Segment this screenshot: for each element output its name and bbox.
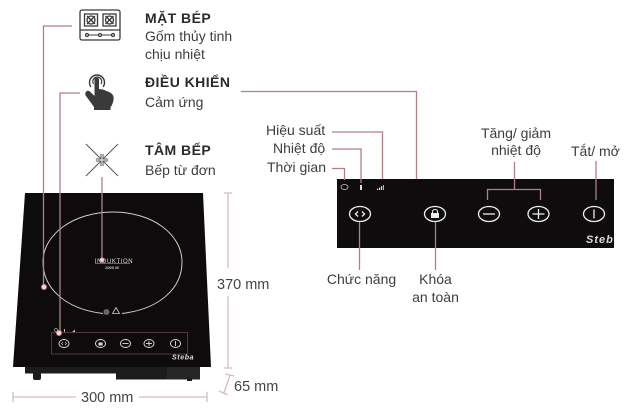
- leader line: zoomed panel: [241, 92, 416, 179]
- icon: single burner: [86, 144, 118, 176]
- button: safety lock: [424, 206, 446, 222]
- dimension: width: [13, 390, 207, 406]
- ring symbols: [104, 308, 120, 315]
- label: safety lock: Khóa: [419, 271, 452, 287]
- icon: touch hand: [85, 75, 114, 110]
- control area outline: [52, 332, 188, 354]
- leader line: controls: [56, 93, 80, 336]
- text: touch controls: Cảm ứng: [145, 94, 203, 110]
- label: increase / decrease temperature: nhiệt độ: [491, 142, 541, 158]
- panel: control panel close-up: [337, 179, 621, 248]
- burner ring: [43, 212, 182, 314]
- heading: burner: TÂM BẾP: [145, 141, 211, 158]
- text: cooktop surface material: chịu nhiệt: [145, 46, 205, 62]
- dimension: depth: 65 mm: [234, 379, 278, 395]
- burner label: INDUKTION: [95, 259, 133, 265]
- label: function: Chức năng: [327, 271, 396, 287]
- text: cooktop surface material: Gốm thủy tinh: [145, 28, 232, 44]
- cooktop base: [25, 366, 200, 381]
- label: safety lock: an toàn: [412, 289, 459, 305]
- label: increase / decrease temperature: [481, 125, 551, 200]
- leader line: burner: [100, 177, 104, 262]
- dimension: height: 370 mm: [217, 277, 269, 293]
- label: on / off: Tắt/ mở: [571, 143, 620, 159]
- label: performance: [266, 122, 382, 179]
- brand logo cropped: Steba: [586, 234, 621, 246]
- label: on / off: [571, 143, 620, 200]
- label: function: [327, 222, 396, 287]
- button: function: [350, 206, 370, 222]
- mini control buttons: [59, 340, 180, 348]
- button: increase: [528, 206, 549, 222]
- dimension: width: 300 mm: [81, 390, 133, 406]
- heading: cooktop surface: MẶT BÉP: [145, 10, 211, 26]
- label: increase / decrease temperature: Tăng/ giảm: [481, 125, 551, 141]
- brand logo: Steba: [172, 354, 194, 362]
- label: timer: Thời gian: [267, 159, 326, 175]
- icon: cooktop surface: [80, 10, 120, 40]
- cooktop glass: [13, 193, 211, 367]
- burner label: [95, 259, 133, 270]
- button: power: [584, 206, 604, 222]
- label: timer: [267, 159, 344, 180]
- burner label: 2000 W: [105, 265, 119, 270]
- status icons: [341, 184, 384, 190]
- label: safety lock: [412, 222, 459, 305]
- label: temperature: Nhiệt độ: [273, 140, 325, 156]
- text: single induction burner: Bếp từ đơn: [145, 162, 216, 178]
- panel background: [337, 179, 614, 248]
- label: performance: Hiệu suất: [266, 122, 325, 138]
- dimension: height: [217, 193, 269, 368]
- leader line: cooktop surface: [41, 26, 72, 290]
- cooktop product: [13, 193, 211, 381]
- label: temperature: [273, 140, 361, 183]
- button: decrease: [478, 206, 500, 222]
- mini status icons: [54, 328, 75, 332]
- dimension: depth: [219, 374, 278, 395]
- heading: controls: ĐIỀU KHIỂN: [145, 73, 230, 90]
